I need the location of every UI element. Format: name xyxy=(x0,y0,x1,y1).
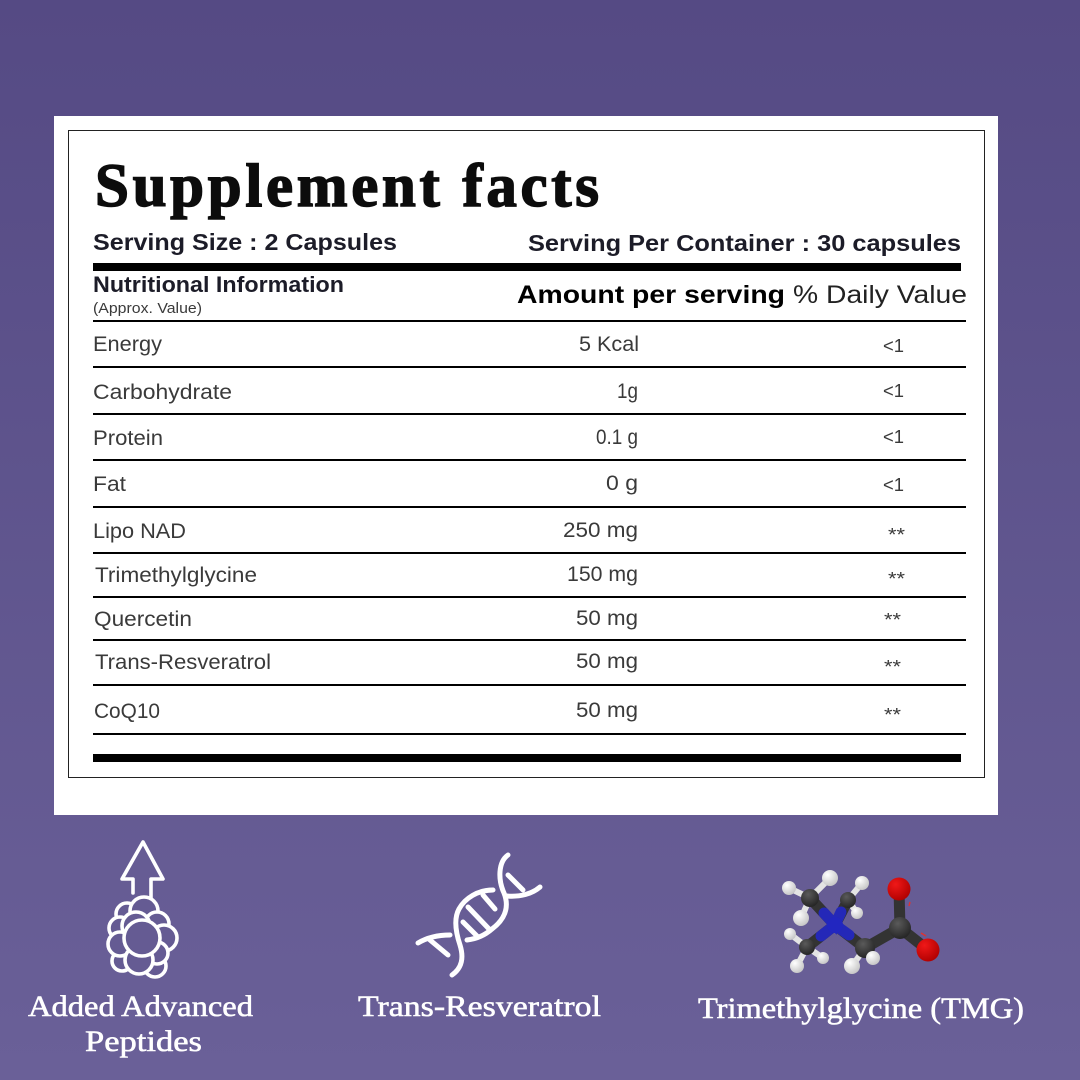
row: energy: 5 Kcal xyxy=(579,333,639,356)
column heading: daily value: % Daily Value xyxy=(793,281,967,309)
label: added advanced peptides xyxy=(28,990,253,1058)
row: trans-resveratrol xyxy=(95,650,901,677)
row: trimethylglycine xyxy=(95,563,905,589)
panel: supplement facts xyxy=(54,116,998,815)
row: carbohydrate: Carbohydrate xyxy=(93,381,232,404)
icon: dna helix xyxy=(418,855,540,975)
row: quercetin: 50 mg xyxy=(576,607,638,630)
row: fat: <1 xyxy=(883,475,904,495)
row: trimethylglycine: ** xyxy=(888,569,905,589)
row: lipo nad: ** xyxy=(888,525,905,545)
row: energy: Energy xyxy=(93,333,163,356)
title: Supplement facts xyxy=(95,153,599,220)
servings per container: Serving Per Container : 30 capsules xyxy=(528,230,961,256)
row: protein: <1 xyxy=(883,427,904,447)
label: trimethylglycine (tmg): Trimethylglycine (TMG) xyxy=(698,992,1024,1025)
icon: trimethylglycine molecule xyxy=(782,870,940,974)
row: trans-resveratrol: 50 mg xyxy=(576,650,638,673)
row: protein xyxy=(93,426,904,450)
label: added advanced peptides: Peptides xyxy=(85,1025,202,1058)
row: coq10 xyxy=(94,699,901,725)
row: coq10: 50 mg xyxy=(576,699,638,722)
bottom thick rule xyxy=(93,754,961,762)
column heading: nutritional information xyxy=(93,272,344,317)
row: protein: Protein xyxy=(93,427,163,450)
row: quercetin xyxy=(94,607,901,631)
icon: peptides arrow and cluster xyxy=(108,842,177,977)
label: trans-resveratrol: Trans-Resveratrol xyxy=(358,990,601,1023)
top thick rule xyxy=(93,263,961,271)
row: fat: 0 g xyxy=(606,472,638,495)
row: carbohydrate xyxy=(93,380,904,404)
row: protein: 0.1 g xyxy=(596,426,638,449)
row: coq10: CoQ10 xyxy=(94,700,160,723)
row: lipo nad: 250 mg xyxy=(563,519,638,542)
row: lipo nad: Lipo NAD xyxy=(93,520,186,543)
row: trans-resveratrol: Trans-Resveratrol xyxy=(95,651,271,674)
row: energy: <1 xyxy=(883,336,904,356)
column heading: amount per serving: Amount per serving xyxy=(517,281,785,309)
row: coq10: ** xyxy=(884,705,901,725)
serving size: Serving Size : 2 Capsules xyxy=(93,229,397,255)
row: quercetin: ** xyxy=(884,610,901,630)
row: carbohydrate: 1g xyxy=(617,380,638,403)
row: lipo nad xyxy=(93,519,905,545)
row: trimethylglycine: Trimethylglycine xyxy=(95,564,257,587)
column heading: nutritional information: (Approx. Value) xyxy=(93,300,202,317)
row: energy xyxy=(93,333,904,356)
row: trimethylglycine: 150 mg xyxy=(567,563,638,586)
label: added advanced peptides: Added Advanced xyxy=(28,990,253,1023)
row: trans-resveratrol: ** xyxy=(884,657,901,677)
row: fat xyxy=(93,472,904,496)
row: quercetin: Quercetin xyxy=(94,608,192,631)
row: carbohydrate: <1 xyxy=(883,381,904,401)
row: fat: Fat xyxy=(93,473,126,496)
column heading: nutritional information: Nutritional Information xyxy=(93,272,344,297)
